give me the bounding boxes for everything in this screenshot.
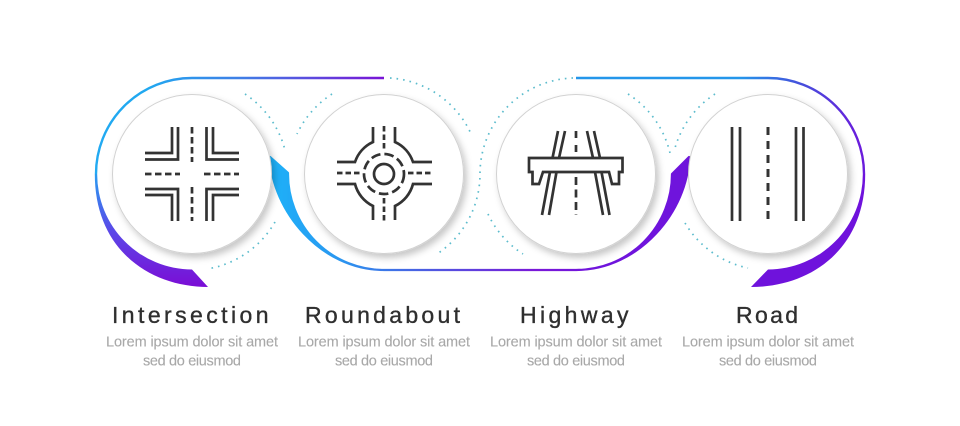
text: description line 2: sed do eiusmod — [719, 354, 817, 370]
heading: Roundabout: Roundabout — [305, 302, 461, 328]
heading: Road: Road — [736, 302, 798, 328]
heading: Highway: Highway — [520, 302, 629, 328]
icon: highway — [529, 131, 622, 215]
text: description line 2: sed do eiusmod — [335, 354, 433, 370]
ribbon: road top line — [576, 78, 864, 174]
text: description line 1: Lorem ipsum dolor sit amet — [682, 334, 854, 350]
label: road — [682, 302, 854, 370]
text: description line 1: Lorem ipsum dolor sit amet — [490, 334, 662, 350]
label: intersection — [106, 302, 278, 370]
text: description line 2: sed do eiusmod — [143, 354, 241, 370]
icon: road — [732, 127, 804, 221]
icon: intersection — [145, 127, 239, 221]
label: highway — [490, 302, 662, 370]
circle: intersection — [112, 94, 272, 254]
dotted connector arcs — [207, 78, 748, 269]
ribbon: intersection top line — [96, 78, 384, 174]
label: roundabout — [298, 302, 470, 370]
circle: highway — [496, 94, 656, 254]
ribbon: roundabout to highway connector — [270, 157, 689, 270]
circle: road — [688, 94, 848, 254]
icon: roundabout — [337, 126, 432, 221]
ribbon: road lower swoosh — [751, 174, 865, 287]
circle: roundabout — [304, 94, 464, 254]
text: description line 2: sed do eiusmod — [527, 354, 625, 370]
text: description line 1: Lorem ipsum dolor sit amet — [298, 334, 470, 350]
heading: Intersection: Intersection — [112, 302, 268, 328]
ribbon: intersection lower swoosh — [95, 174, 208, 287]
text: description line 1: Lorem ipsum dolor sit amet — [106, 334, 278, 350]
